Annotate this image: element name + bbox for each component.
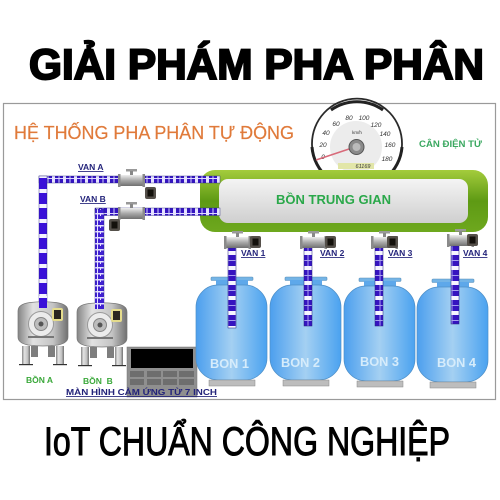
label: intermediate tank: BỒN TRUNG GIAN (276, 192, 391, 207)
gauge: scale dial: 20 (318, 142, 327, 149)
label: touch screen: MÀN HÌNH CẢM ỨNG TỪ 7 INCH (66, 386, 217, 397)
gauge: scale dial: 0 (321, 154, 325, 161)
tank labels: BON 4 (437, 355, 477, 370)
label: van B: VAN B (80, 194, 106, 204)
label: van 1: VAN 1 (241, 248, 266, 258)
valve B (109, 202, 145, 231)
steel tank A (18, 302, 68, 365)
tank labels: BON 3 (360, 354, 399, 369)
label: van 3: VAN 3 (388, 248, 413, 258)
gauge: scale dial: 140 (380, 131, 391, 138)
tank: intermediate tank (200, 170, 488, 232)
gauge: scale dial: 100 (359, 115, 370, 122)
gauge: scale dial: 40 (322, 130, 330, 137)
label: van 4: VAN 4 (463, 248, 488, 258)
gauge: scale dial (312, 99, 402, 192)
gauge: scale dial: 61169 (356, 164, 370, 170)
tank labels: BON 2 (281, 355, 320, 370)
gauge: scale dial: 160 (385, 142, 396, 149)
gauge: scale dial: km/h (352, 130, 362, 135)
pipe: line B (95, 208, 220, 309)
valve A (118, 169, 156, 199)
valve 1 (224, 231, 261, 249)
valve 2 (300, 231, 336, 249)
gauge: scale dial: 120 (371, 122, 382, 129)
label: van 2: VAN 2 (320, 248, 345, 258)
tank 2 (270, 277, 341, 386)
label: tank A: BỒN A (26, 374, 53, 385)
tank 4 (417, 279, 488, 388)
diagram heading: HỆ THỐNG PHA PHÂN TỰ ĐỘNG (14, 122, 294, 143)
tank labels: BON 1 (210, 356, 249, 371)
tank 1 (196, 277, 267, 386)
title: GIẢI PHÁM PHA PHÂN (29, 40, 484, 89)
panel: system diagram (4, 99, 496, 400)
steel tank B (77, 303, 127, 366)
label: tank B: BỒN B (83, 375, 113, 386)
label: van A: VAN A (78, 162, 104, 172)
valve 3 (371, 231, 398, 249)
valve 4 (447, 229, 478, 247)
pipe tip B over tank (95, 296, 104, 309)
gauge: scale dial: 180 (382, 156, 393, 163)
pipe: line A (39, 176, 220, 310)
pipe tip A over tank (39, 296, 47, 308)
gauge: scale dial: 80 (345, 115, 353, 122)
label: electronic scale: CÂN ĐIỆN TỬ (419, 138, 482, 150)
tank 3 (344, 278, 415, 387)
touch screen (127, 347, 197, 397)
tank labels (210, 354, 477, 371)
gauge: scale dial: 60 (332, 121, 340, 128)
outlet pipes (228, 246, 459, 328)
